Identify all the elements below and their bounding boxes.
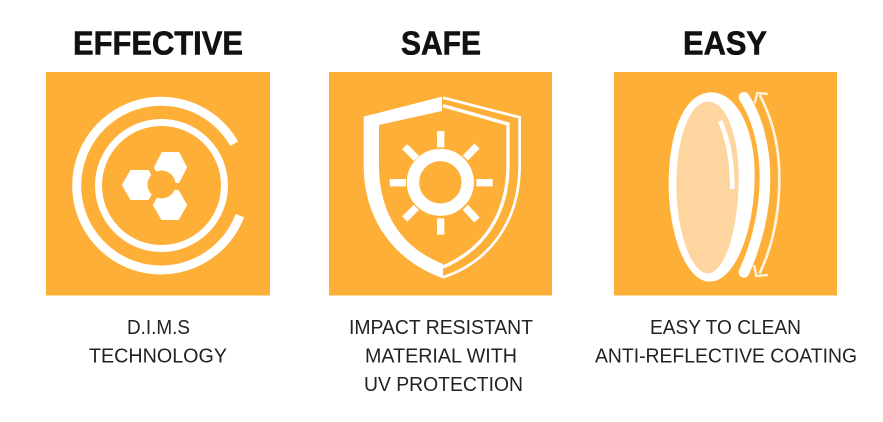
text: impact resistant material: MATERIAL WITH — [365, 344, 517, 368]
text: easy to clean coating: EASY TO CLEAN — [650, 316, 801, 339]
text: impact resistant material — [349, 316, 533, 396]
text: dims technology: TECHNOLOGY — [89, 344, 227, 367]
text: impact resistant material: IMPACT RESISTANT — [349, 316, 533, 339]
heading: effective: EFFECTIVE — [73, 24, 243, 62]
heading: safe: SAFE — [401, 24, 481, 62]
heading: easy: EASY — [683, 24, 767, 62]
panel: safe — [329, 72, 552, 296]
text: easy to clean coating — [595, 316, 857, 368]
text: easy to clean coating: ANTI-REFLECTIVE COATING — [595, 344, 857, 368]
text: dims technology: D.I.M.S — [127, 316, 190, 339]
panel: effective — [46, 72, 270, 296]
icon: lens with coating — [669, 92, 779, 282]
panel: easy — [614, 72, 837, 296]
text: impact resistant material: UV PROTECTION — [364, 373, 523, 396]
icon: shield with sun — [364, 97, 520, 278]
text: dims technology — [89, 316, 227, 367]
icon: dims technology — [77, 101, 240, 270]
